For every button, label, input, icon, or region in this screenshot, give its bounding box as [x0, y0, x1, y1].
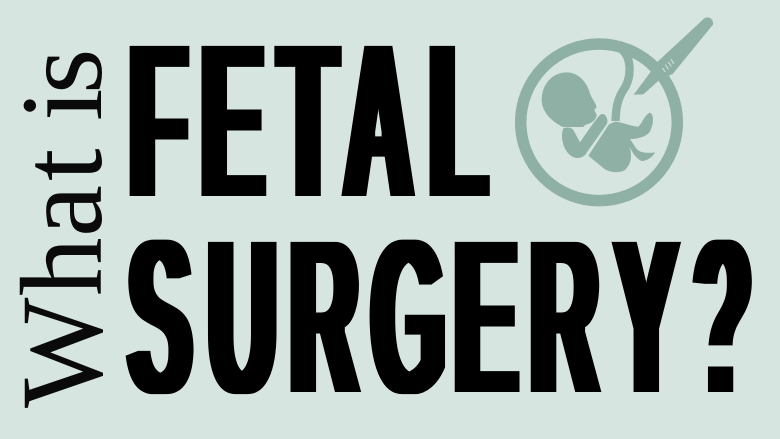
arm [562, 114, 607, 158]
heading: What is: What is [0, 48, 127, 408]
icon: fetus in womb with scalpel [521, 17, 713, 201]
fetus and cord [542, 50, 655, 172]
heading: SURGERY?: SURGERY? [129, 192, 751, 439]
umbilical cord [616, 50, 630, 121]
scalpel grip marks [662, 59, 674, 72]
torso and legs [588, 113, 655, 172]
head [542, 72, 597, 127]
scalpel [634, 17, 713, 95]
heading: FETAL: FETAL [129, 0, 487, 246]
womb ring [521, 44, 677, 201]
